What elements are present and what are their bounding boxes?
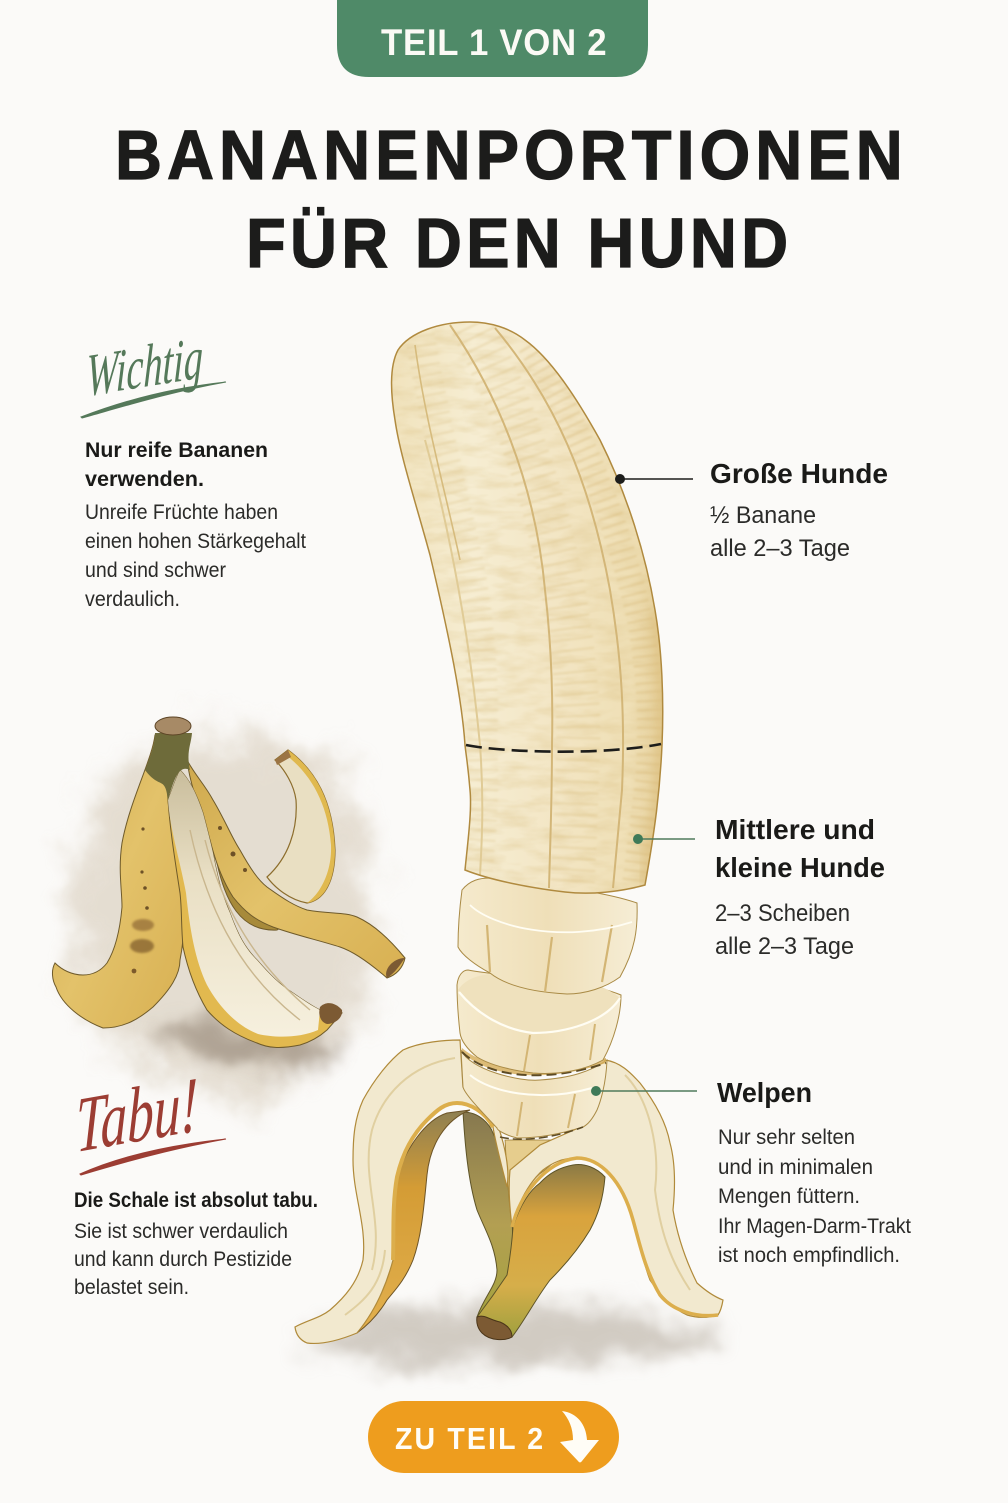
text block: peel warning: belastet sein. xyxy=(74,1276,189,1299)
slice 3 xyxy=(461,1048,607,1139)
callout: large dogs: Große Hunde xyxy=(710,458,888,489)
leader line xyxy=(633,834,695,844)
note: Wichtig xyxy=(81,324,306,611)
callout: medium and small dogs: 2–3 Scheiben xyxy=(715,900,850,927)
left flap xyxy=(52,735,184,1028)
peel: center back xyxy=(463,1112,513,1317)
text block: peel warning: und kann durch Pestizide xyxy=(74,1248,292,1271)
text block: ripe bananas: und sind schwer xyxy=(85,559,226,582)
callout: puppies: Nur sehr selten xyxy=(718,1126,855,1149)
text block: ripe bananas: verwenden. xyxy=(85,467,204,491)
illustration: banana xyxy=(295,315,730,1365)
stem tip xyxy=(145,717,192,800)
text block: peel warning: Sie ist schwer verdaulich xyxy=(74,1220,288,1243)
text block: ripe bananas: Nur reife Bananen xyxy=(85,438,268,462)
peel: front flap xyxy=(477,1165,605,1338)
leader line xyxy=(591,1086,697,1096)
tab: part label: TEIL 1 VON 2 xyxy=(381,22,607,63)
stem end xyxy=(477,1316,512,1340)
text block: peel warning xyxy=(74,1188,318,1299)
callout: puppies: Ihr Magen-Darm-Trakt xyxy=(718,1215,911,1238)
button: to part 2: ZU TEIL 2 xyxy=(395,1422,543,1456)
icon: curved down arrow xyxy=(560,1411,599,1462)
title xyxy=(115,117,903,283)
center flap xyxy=(168,770,342,1047)
callout: medium and small dogs: kleine Hunde xyxy=(715,852,885,883)
text block: ripe bananas: einen hohen Stärkegehalt xyxy=(85,530,306,553)
callout: large dogs: ½ Banane xyxy=(710,502,816,529)
watercolor stain xyxy=(73,737,373,1101)
peel: right flap xyxy=(509,1060,723,1317)
callout: large dogs xyxy=(615,458,888,562)
dashed cut line xyxy=(466,744,661,752)
banana stub under peel xyxy=(505,1140,580,1225)
title: BANANENPORTIONEN xyxy=(115,117,903,195)
note: Tabu xyxy=(74,1061,318,1299)
callout: puppies xyxy=(591,1077,911,1267)
button: to part 2 xyxy=(368,1401,619,1473)
illustration: banana peel xyxy=(52,717,405,1101)
slice 1 xyxy=(458,878,637,994)
ground shadow xyxy=(300,1304,730,1365)
banana body xyxy=(385,315,670,900)
peel: left flap inner xyxy=(357,1110,470,1333)
callout: puppies: Welpen xyxy=(717,1077,812,1108)
callout: medium and small dogs: alle 2–3 Tage xyxy=(715,933,854,960)
text block: ripe bananas: verdaulich. xyxy=(85,588,180,611)
brush underline xyxy=(80,1139,226,1175)
text block: ripe bananas xyxy=(85,438,306,611)
peel: left flap xyxy=(295,1040,508,1343)
text block: peel warning: Die Schale ist absolut tabu. xyxy=(74,1188,318,1212)
handwritten heading: Tabu: Tabu! xyxy=(76,1061,198,1170)
title: FÜR DEN HUND xyxy=(246,205,788,283)
callout: medium and small dogs: Mittlere und xyxy=(715,814,875,845)
brush underline xyxy=(81,382,226,418)
back flap xyxy=(267,750,335,903)
leader line xyxy=(615,474,693,484)
slice 2 xyxy=(457,970,621,1073)
callout: puppies: ist noch empfindlich. xyxy=(718,1244,900,1267)
tab: part label xyxy=(337,0,648,77)
shadow xyxy=(150,1016,345,1071)
dark underside xyxy=(217,863,285,930)
banana ribs and watercolor texture xyxy=(385,315,670,900)
handwritten heading: Wichtig: Wichtig xyxy=(86,324,203,410)
text block: ripe bananas: Unreife Früchte haben xyxy=(85,501,278,524)
callout: puppies: Mengen füttern. xyxy=(718,1185,860,1208)
callout: medium and small dogs xyxy=(633,814,885,960)
right flap xyxy=(187,760,405,978)
callout: puppies: und in minimalen xyxy=(718,1156,873,1179)
callout: large dogs: alle 2–3 Tage xyxy=(710,535,850,562)
